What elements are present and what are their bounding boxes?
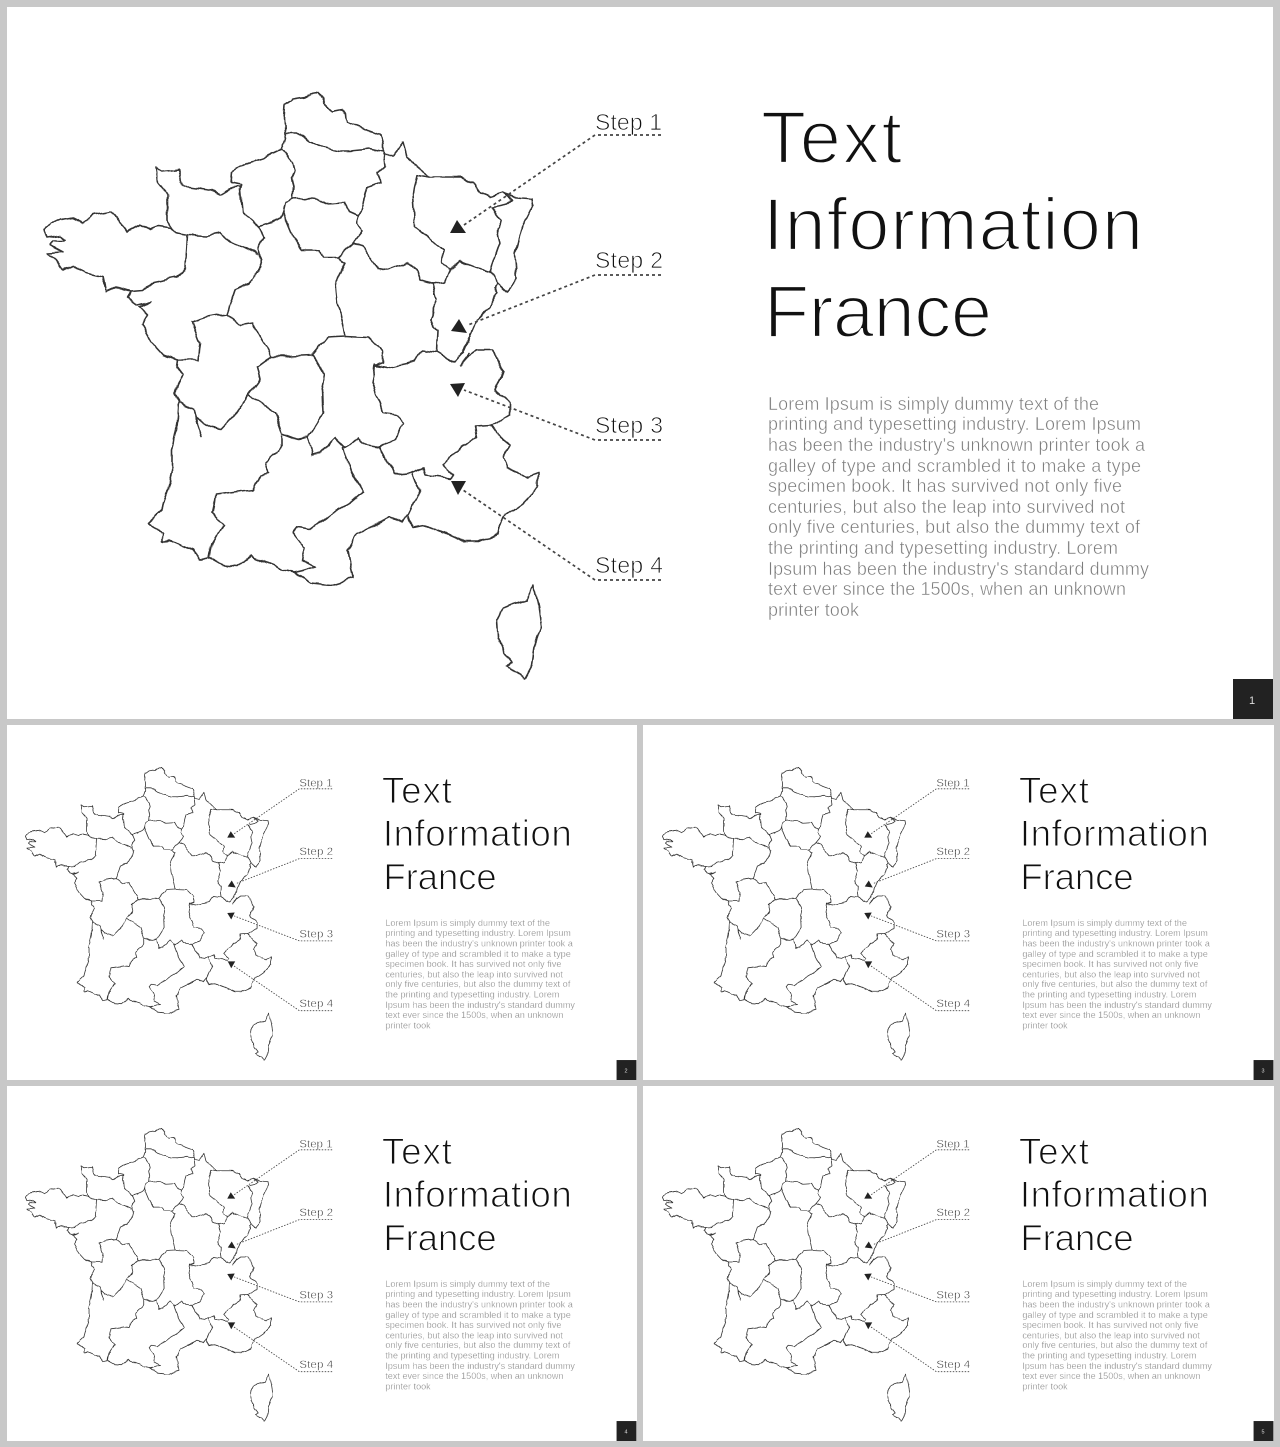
title bbox=[1019, 1131, 1209, 1259]
body text: printer took bbox=[385, 1382, 431, 1392]
body text: galley of type and scrambled it to make a type bbox=[385, 1310, 571, 1320]
body text: specimen book. It has survived not only five bbox=[1022, 959, 1198, 969]
body text: only five centuries, but also the dummy text of bbox=[385, 979, 571, 989]
title: Information bbox=[383, 1174, 572, 1215]
step labels: Step 2 bbox=[299, 846, 333, 858]
panel: slide 3 bbox=[643, 725, 1274, 1080]
step labels: Step 3 bbox=[936, 1289, 970, 1301]
body text: Ipsum has been the industry's standard dummy bbox=[385, 1361, 575, 1371]
body text: specimen book. It has survived not only five bbox=[385, 1320, 561, 1330]
body text: the printing and typesetting industry. Lorem bbox=[385, 990, 559, 1000]
body text: the printing and typesetting industry. Lorem bbox=[385, 1351, 559, 1361]
body text: centuries, but also the leap into survived not bbox=[1022, 969, 1200, 979]
step labels: Step 4 bbox=[299, 998, 334, 1010]
panel: slide 5 bbox=[643, 1086, 1274, 1441]
step labels: Step 1 bbox=[936, 777, 970, 789]
body text: only five centuries, but also the dummy text of bbox=[768, 517, 1141, 537]
body text: Ipsum has been the industry's standard dummy bbox=[1022, 1361, 1212, 1371]
title: Information bbox=[763, 183, 1143, 266]
body text: printer took bbox=[385, 1021, 431, 1031]
page number badge: 4 bbox=[624, 1430, 628, 1436]
body text: printing and typesetting industry. Lorem Ipsum bbox=[1022, 1289, 1208, 1299]
body text: only five centuries, but also the dummy text of bbox=[1022, 979, 1208, 989]
page number badge bbox=[1233, 679, 1273, 719]
body text: centuries, but also the leap into survived not bbox=[1022, 1330, 1200, 1340]
body text: specimen book. It has survived not only five bbox=[385, 959, 561, 969]
title: Text bbox=[382, 770, 452, 811]
step arrows bbox=[864, 789, 969, 1011]
body text: text ever since the 1500s, when an unknown bbox=[385, 1371, 563, 1381]
step labels bbox=[936, 1138, 971, 1371]
step arrows bbox=[227, 789, 332, 1011]
page number badge bbox=[1254, 1060, 1273, 1080]
body text: Ipsum has been the industry's standard dummy bbox=[768, 559, 1149, 579]
page number badge bbox=[617, 1060, 636, 1080]
body text: printing and typesetting industry. Lorem Ipsum bbox=[1022, 928, 1208, 938]
step labels: Step 4 bbox=[936, 998, 971, 1010]
body text: centuries, but also the leap into survived not bbox=[768, 497, 1125, 517]
step labels: Step 1 bbox=[299, 1138, 333, 1150]
body text bbox=[1022, 918, 1212, 1031]
step labels: Step 1 bbox=[936, 1138, 970, 1150]
panel: main slide bbox=[7, 7, 1273, 719]
step labels bbox=[936, 777, 971, 1010]
map of France bbox=[25, 767, 273, 1060]
body text: the printing and typesetting industry. Lorem bbox=[768, 538, 1118, 558]
step labels bbox=[299, 1138, 334, 1371]
body text: Lorem Ipsum is simply dummy text of the bbox=[1022, 918, 1187, 928]
page number badge: 3 bbox=[1261, 1069, 1265, 1075]
step arrows bbox=[864, 1150, 969, 1372]
body text bbox=[385, 918, 575, 1031]
step labels: Step 2 bbox=[299, 1207, 333, 1219]
map of France bbox=[44, 92, 541, 678]
step labels: Step 2 bbox=[936, 1207, 970, 1219]
step labels: Step 1 bbox=[595, 109, 662, 135]
step labels: Step 3 bbox=[299, 1289, 333, 1301]
body text: printer took bbox=[768, 600, 860, 620]
body text: galley of type and scrambled it to make a type bbox=[1022, 949, 1208, 959]
panel: slide 4 bbox=[7, 1086, 637, 1441]
body text: specimen book. It has survived not only five bbox=[1022, 1320, 1198, 1330]
step labels: Step 2 bbox=[595, 247, 663, 273]
map of France bbox=[662, 1128, 910, 1421]
body text: text ever since the 1500s, when an unknown bbox=[768, 579, 1126, 599]
body text: centuries, but also the leap into survived not bbox=[385, 969, 563, 979]
step labels: Step 4 bbox=[595, 552, 663, 578]
step labels bbox=[595, 109, 663, 578]
step labels: Step 3 bbox=[595, 412, 663, 438]
title: France bbox=[764, 270, 992, 353]
step labels: Step 3 bbox=[299, 928, 333, 940]
body text: text ever since the 1500s, when an unknown bbox=[1022, 1371, 1200, 1381]
body text: Lorem Ipsum is simply dummy text of the bbox=[1022, 1279, 1187, 1289]
title: Text bbox=[382, 1131, 452, 1172]
body text: text ever since the 1500s, when an unknown bbox=[385, 1010, 563, 1020]
page number badge: 5 bbox=[1261, 1430, 1265, 1436]
page number badge bbox=[1254, 1421, 1273, 1441]
body text: has been the industry's unknown printer took a bbox=[385, 1299, 573, 1309]
body text: printer took bbox=[1022, 1021, 1068, 1031]
body text: specimen book. It has survived not only five bbox=[768, 476, 1122, 496]
page number badge: 1 bbox=[1249, 695, 1255, 707]
title: France bbox=[383, 1217, 497, 1259]
body text: only five centuries, but also the dummy text of bbox=[385, 1340, 571, 1350]
title bbox=[761, 96, 1143, 353]
body text bbox=[768, 394, 1149, 620]
body text: printing and typesetting industry. Lorem Ipsum bbox=[385, 1289, 571, 1299]
body text: has been the industry's unknown printer took a bbox=[1022, 1299, 1210, 1309]
title: Text bbox=[1019, 1131, 1089, 1172]
body text: Lorem Ipsum is simply dummy text of the bbox=[385, 918, 550, 928]
step labels: Step 4 bbox=[299, 1359, 334, 1371]
body text: the printing and typesetting industry. Lorem bbox=[1022, 990, 1196, 1000]
body text: Lorem Ipsum is simply dummy text of the bbox=[768, 394, 1099, 414]
title bbox=[1019, 770, 1209, 898]
body text bbox=[385, 1279, 575, 1392]
title: France bbox=[1020, 856, 1134, 898]
page number badge bbox=[617, 1421, 636, 1441]
body text: printing and typesetting industry. Lorem Ipsum bbox=[768, 414, 1141, 434]
title: France bbox=[383, 856, 497, 898]
step labels: Step 3 bbox=[936, 928, 970, 940]
title: Information bbox=[1020, 813, 1209, 854]
title: France bbox=[1020, 1217, 1134, 1259]
title: Information bbox=[1020, 1174, 1209, 1215]
map of France bbox=[662, 767, 910, 1060]
step labels bbox=[299, 777, 334, 1010]
map of France bbox=[25, 1128, 273, 1421]
title bbox=[382, 770, 572, 898]
step arrows bbox=[227, 1150, 332, 1372]
body text: galley of type and scrambled it to make a type bbox=[768, 456, 1141, 476]
body text: text ever since the 1500s, when an unknown bbox=[1022, 1010, 1200, 1020]
title: Text bbox=[761, 96, 902, 179]
body text: has been the industry's unknown printer took a bbox=[768, 435, 1146, 455]
body text: the printing and typesetting industry. Lorem bbox=[1022, 1351, 1196, 1361]
body text: Ipsum has been the industry's standard dummy bbox=[385, 1000, 575, 1010]
step labels: Step 1 bbox=[299, 777, 333, 789]
panel: slide 2 bbox=[7, 725, 637, 1080]
body text: galley of type and scrambled it to make a type bbox=[1022, 1310, 1208, 1320]
body text: centuries, but also the leap into survived not bbox=[385, 1330, 563, 1340]
body text: has been the industry's unknown printer took a bbox=[385, 938, 573, 948]
title bbox=[382, 1131, 572, 1259]
title: Text bbox=[1019, 770, 1089, 811]
title: Information bbox=[383, 813, 572, 854]
step arrows bbox=[450, 135, 661, 580]
body text: Lorem Ipsum is simply dummy text of the bbox=[385, 1279, 550, 1289]
step labels: Step 4 bbox=[936, 1359, 971, 1371]
body text: printer took bbox=[1022, 1382, 1068, 1392]
step labels: Step 2 bbox=[936, 846, 970, 858]
body text bbox=[1022, 1279, 1212, 1392]
body text: only five centuries, but also the dummy text of bbox=[1022, 1340, 1208, 1350]
body text: Ipsum has been the industry's standard dummy bbox=[1022, 1000, 1212, 1010]
page number badge: 2 bbox=[624, 1069, 628, 1075]
body text: printing and typesetting industry. Lorem Ipsum bbox=[385, 928, 571, 938]
body text: has been the industry's unknown printer took a bbox=[1022, 938, 1210, 948]
body text: galley of type and scrambled it to make a type bbox=[385, 949, 571, 959]
